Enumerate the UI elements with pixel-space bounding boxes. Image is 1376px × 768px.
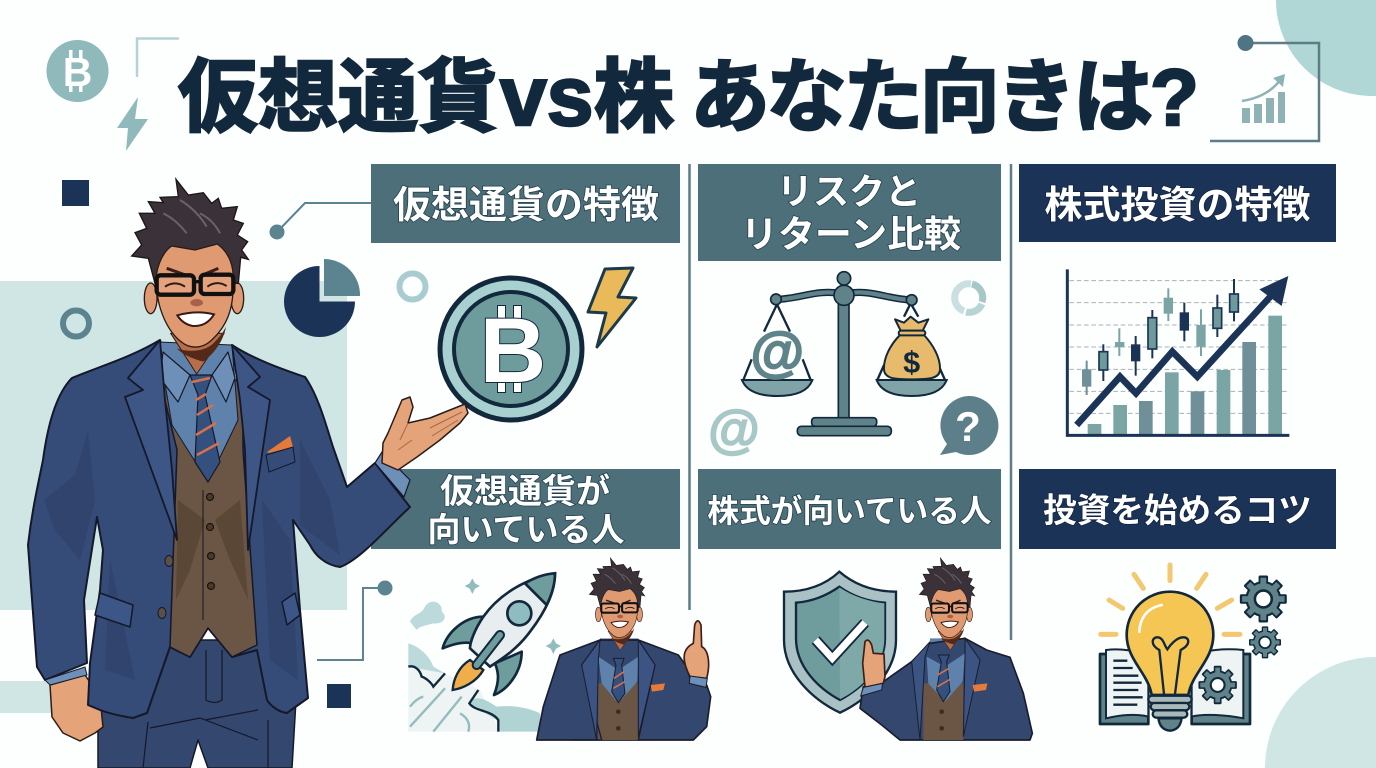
decorative dividers	[690, 164, 1011, 640]
panel: who suits crypto	[371, 469, 711, 740]
panel: crypto features	[371, 164, 680, 420]
icon: lightbulb book and gears	[1100, 565, 1287, 731]
heading: stock features: 株式投資の特徴	[1044, 185, 1311, 227]
man head	[589, 558, 645, 650]
vest	[160, 380, 257, 657]
panel: stock features	[1019, 164, 1336, 435]
shirt	[158, 342, 238, 482]
icon: question bubble: ?	[955, 403, 981, 450]
icon: bitcoin coin: B	[480, 300, 546, 402]
icon: bitcoin badge: B	[63, 49, 92, 95]
heading: crypto features: 仮想通貨の特徴	[393, 185, 659, 227]
title: ?	[1150, 53, 1199, 142]
jacket buttons	[158, 556, 173, 618]
title: vs	[500, 49, 593, 143]
icon: balance scale: @	[751, 321, 804, 383]
head	[132, 179, 248, 374]
illustration: presenter man	[28, 179, 468, 768]
connector: bottom callout	[317, 580, 392, 660]
heading: crypto features	[371, 164, 680, 243]
heading: who suits crypto: 仮想通貨が	[440, 472, 610, 511]
heading: who suits stocks	[698, 469, 1001, 549]
icon: bitcoin badge	[46, 40, 108, 102]
heading: risk and return	[698, 164, 1001, 261]
title: 仮想通貨	[178, 53, 498, 142]
icon: lightning bolt	[588, 268, 636, 347]
icon: broken ring	[955, 284, 983, 312]
heading: investing tips: 投資を始めるコツ	[1043, 492, 1312, 530]
connector: top callout	[270, 203, 371, 240]
icon: small lightning	[117, 97, 148, 151]
illustration: man thumbs up	[860, 558, 1032, 740]
left arm and torso	[28, 340, 410, 718]
man head	[919, 558, 975, 650]
title: 株	[594, 53, 674, 142]
left hand	[50, 675, 103, 741]
vest buttons	[206, 494, 214, 590]
chart: candlestick and bars	[1067, 269, 1289, 435]
pocket flaps	[95, 593, 300, 627]
heading: investing tips	[1019, 469, 1336, 549]
icon: bitcoin coin	[440, 278, 582, 420]
title: あなた向きは	[690, 53, 1151, 142]
decorative bracket	[137, 38, 179, 77]
heading: stock features	[1019, 164, 1336, 242]
panel: risk and return	[698, 164, 1001, 459]
right cuff	[375, 452, 410, 497]
navy squares	[62, 180, 351, 708]
icon: rocket	[408, 573, 561, 732]
left cuff	[45, 667, 87, 685]
tie	[190, 375, 220, 482]
panel: investing tips	[1019, 469, 1336, 731]
icon: shield with check	[784, 572, 896, 713]
icon: question bubble	[940, 396, 998, 455]
icon: balance scale: $	[903, 346, 920, 380]
pants	[98, 640, 296, 768]
icon: small at sign: @	[708, 400, 760, 459]
heading: who suits crypto: 向いている人	[427, 511, 625, 548]
right hand	[382, 397, 468, 470]
pocket square	[267, 436, 293, 453]
illustration: man pointing up	[537, 558, 711, 740]
heading: who suits crypto	[371, 469, 680, 549]
heading: risk and return: リスクと	[777, 171, 921, 212]
heading: risk and return: リターン比較	[741, 214, 961, 255]
collar	[160, 352, 235, 402]
lapels	[125, 340, 177, 540]
icon: growth chart with connector	[1210, 35, 1319, 141]
heading: who suits stocks: 株式が向いている人	[707, 493, 992, 529]
rings	[63, 274, 426, 336]
icon: balance scale	[742, 272, 947, 436]
icon: pie chart	[284, 259, 360, 337]
panel: who suits stocks	[698, 469, 1032, 740]
